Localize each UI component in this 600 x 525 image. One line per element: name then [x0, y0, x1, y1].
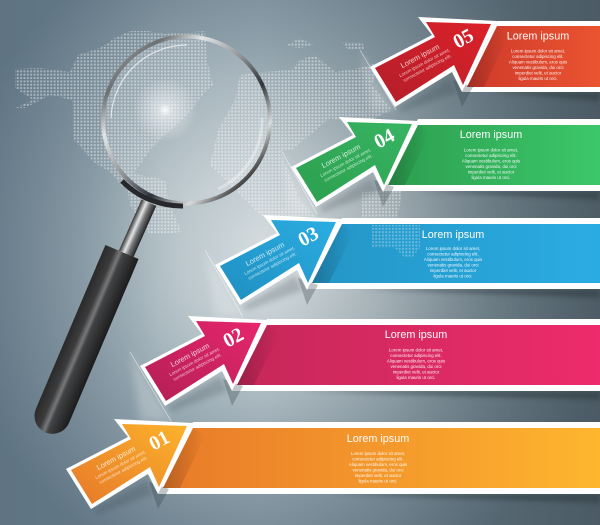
band 4 text: imperdiet velit, et auctor	[468, 170, 515, 174]
band 4 text: ligula mauris ut orci.	[471, 175, 511, 180]
band 2	[232, 319, 600, 391]
band 5 text: Aliquam vestibulum, eros quis	[509, 60, 568, 64]
band 1 text: imperdiet velit, et auctor	[355, 473, 402, 478]
lens glass	[104, 38, 268, 202]
arrow 02 label: consectetur adipiscing elit.	[172, 352, 222, 382]
arrow 02	[140, 316, 267, 411]
band 5 text: ligula mauris ut orci.	[518, 76, 558, 81]
band 1 text: consectetur adipiscing elit.	[352, 456, 404, 462]
band 3	[307, 218, 600, 289]
dotted world map	[15, 31, 402, 235]
arrow 04 label	[315, 138, 375, 183]
band 5 text: venenatis gravida, dui orci	[512, 65, 564, 70]
arrow 02 label	[164, 337, 224, 382]
arrow 03 label: consectetur adipiscing elit.	[247, 251, 297, 281]
lens ring	[103, 36, 270, 204]
band 1	[158, 422, 600, 494]
band 4 text	[462, 148, 521, 180]
band 2 text	[387, 348, 446, 380]
arrow 01	[66, 419, 193, 514]
band 1 text: ligula mauris ut orci.	[358, 478, 398, 484]
band 4 heading: Lorem ipsum	[460, 129, 522, 141]
arrow 04 label: consectetur adipiscing elit.	[323, 153, 373, 183]
band 1 text: Aliquam vestibulum, eros quis	[349, 462, 408, 467]
lens collar	[122, 181, 183, 206]
band 3 text: Aliquam vestibulum, eros quis	[424, 257, 483, 262]
magnifying glass	[29, 36, 270, 439]
band 4 text: venenatis gravida, dui orci	[465, 164, 517, 169]
band 1 text: Lorem ipsum dolor sit amet,	[351, 451, 405, 456]
arrow 01 label: consectetur adipiscing elit.	[98, 455, 148, 485]
arrow 01 label	[90, 440, 150, 485]
item 2: pink band and arrow	[140, 316, 600, 411]
band 3 text: venenatis gravida, dui orci	[427, 262, 479, 268]
band 3 text: Lorem ipsum dolor sit amet,	[426, 246, 480, 251]
item 5: red band and arrow	[370, 17, 600, 112]
band 2 text: Aliquam vestibulum, eros quis	[387, 358, 446, 364]
arrow 03 label: Lorem ipsum	[244, 240, 286, 268]
band 4 text: consectetur adipiscing elit.	[465, 153, 517, 158]
band 5 text	[509, 48, 568, 81]
band 2 text: Lorem ipsum dolor sit amet,	[389, 348, 443, 352]
band 2 heading: Lorem ipsum	[385, 329, 447, 341]
band 3 heading: Lorem ipsum	[422, 229, 484, 241]
band 2 text: ligula mauris ut orci.	[396, 375, 436, 380]
band 5	[462, 21, 600, 92]
band 1 text: venenatis gravida, dui orci	[352, 468, 404, 472]
band 5 text: imperdiet velit, et auctor	[515, 70, 562, 76]
arrow 01 label: Lorem ipsum	[95, 444, 137, 472]
arrow 05 label	[394, 38, 454, 83]
arrow 03	[215, 215, 342, 310]
band 3 text: imperdiet velit, et auctor	[430, 268, 477, 273]
arrow 05 label: Lorem ipsum	[399, 42, 441, 70]
arrow 04 label: Lorem ipsum	[320, 142, 362, 170]
band 1 heading: Lorem ipsum	[347, 433, 409, 445]
item 1: orange band and arrow	[66, 419, 600, 514]
band 5 text: Lorem ipsum dolor sit amet,	[511, 48, 565, 54]
band 2 text: consectetur adipiscing elit.	[390, 353, 442, 358]
band 5 text: consectetur adipiscing elit.	[512, 54, 564, 59]
item 3: blue band and arrow	[215, 215, 600, 310]
arrow 04 label: Lorem ipsum dolor sit amet,	[319, 147, 372, 178]
item 4: green band and arrow	[291, 117, 600, 212]
band 5 heading: Lorem ipsum	[507, 30, 569, 42]
arrow 04	[291, 117, 418, 212]
arrow 05 label: Lorem ipsum dolor sit amet,	[398, 47, 451, 78]
arrow 03 label: Lorem ipsum dolor sit amet,	[243, 245, 296, 276]
band 1 text	[349, 451, 408, 484]
number 05: 05	[449, 24, 477, 53]
arrow 05	[370, 17, 497, 112]
arrow 01 label: Lorem ipsum dolor sit amet,	[94, 449, 147, 480]
number 02: 02	[219, 323, 247, 352]
band 3 text	[424, 246, 483, 278]
band 4	[383, 119, 600, 191]
band 2 text: imperdiet velit, et auctor	[393, 370, 440, 374]
arrow 02 label: Lorem ipsum	[169, 341, 211, 369]
arrow 03 label	[239, 236, 299, 281]
band 4 text: Aliquam vestibulum, eros quis	[462, 158, 521, 164]
handle	[29, 245, 139, 439]
band 3 text: ligula mauris ut orci.	[433, 274, 473, 278]
number 04: 04	[370, 124, 398, 153]
number 01: 01	[145, 426, 173, 455]
arrow 05 label: consectetur adipiscing elit.	[402, 53, 452, 83]
band 2 text: venenatis gravida, dui orci	[390, 364, 442, 369]
number 03: 03	[294, 222, 322, 251]
neck	[119, 199, 156, 257]
band 3 text: consectetur adipiscing elit.	[427, 252, 479, 256]
band 4 text: Lorem ipsum dolor sit amet,	[464, 148, 518, 152]
arrow 02 label: Lorem ipsum dolor sit amet,	[168, 346, 221, 377]
